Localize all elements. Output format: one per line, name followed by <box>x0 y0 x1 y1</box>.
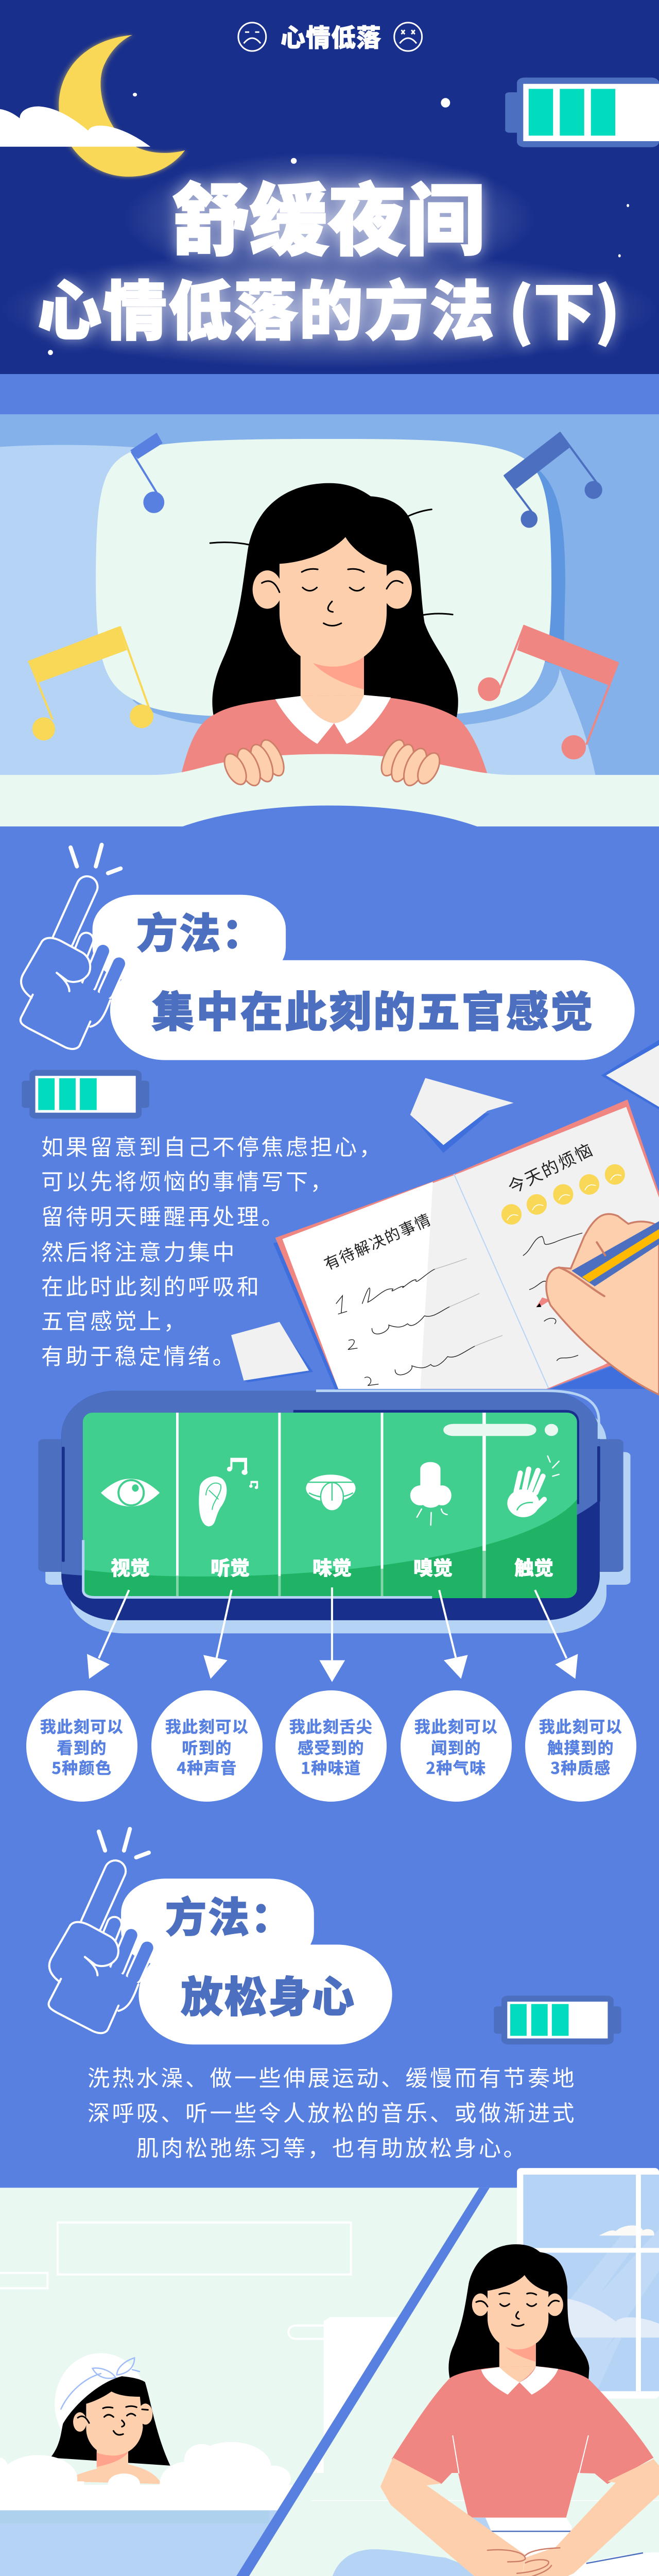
arrow: taste <box>319 1587 345 1682</box>
method title: 放松身心 <box>181 1963 356 2024</box>
icon: dark blue music note <box>504 432 602 528</box>
icon: blue music note <box>130 433 164 513</box>
panel: relaxation illustration <box>0 2168 659 2576</box>
panel: method 1 heading <box>21 845 635 1060</box>
panel: sleeping woman illustration <box>0 414 659 826</box>
callout: hearing <box>151 1690 263 1802</box>
text: method 1 description: 有助于稳定情绪。 <box>41 1339 237 1371</box>
sense labels: 触觉 <box>514 1552 553 1581</box>
illustration: notebook with hand <box>273 1099 659 1395</box>
callout: taste: 感受到的 <box>298 1735 365 1758</box>
title line 1: 舒缓夜间 <box>171 158 484 271</box>
wall background <box>0 2188 659 2576</box>
callout: smell: 我此刻可以 <box>414 1714 498 1737</box>
tablet side wings <box>38 1439 623 1572</box>
text: method 2 description: 肌肉松弛练习等，也有助放松身心。 <box>136 2131 528 2163</box>
callout: hearing: 我此刻可以 <box>165 1714 249 1737</box>
text: method 2 description: 深呼吸、听一些令人放松的音乐、或做渐进式 <box>88 2096 577 2128</box>
callout: touch: 3种质感 <box>550 1755 611 1778</box>
panel: window <box>517 2168 659 2399</box>
method label: 方法： <box>165 1885 293 1944</box>
callout: touch <box>525 1690 636 1802</box>
callout: taste: 我此刻舌尖 <box>289 1714 373 1737</box>
sense labels <box>111 1552 553 1581</box>
tablet shadows <box>45 1402 630 1633</box>
icon: pink music note <box>478 625 619 759</box>
icon: hand touch <box>507 1456 559 1517</box>
panel: night sky header <box>0 0 659 374</box>
callout: hearing: 4种声音 <box>177 1755 237 1778</box>
callout: touch: 我此刻可以 <box>539 1714 622 1737</box>
bath water <box>0 2510 278 2576</box>
sense labels: 味觉 <box>313 1552 352 1581</box>
text: method 1 description: 在此时此刻的呼吸和 <box>41 1269 262 1301</box>
callout: smell: 2种气味 <box>426 1755 487 1778</box>
text: method 2 description <box>88 2061 577 2163</box>
callout: sight: 我此刻可以 <box>40 1714 124 1737</box>
text: method 1 description: 然后将注意力集中 <box>41 1235 237 1267</box>
heading bubbles <box>121 1878 392 2044</box>
text: method 1 description: 可以先将烦恼的事情写下， <box>41 1164 335 1196</box>
foam bubbles <box>0 2442 294 2510</box>
callout: smell: 闻到的 <box>431 1735 481 1758</box>
text: method 1 description: 留待明天睡醒再处理。 <box>41 1199 286 1231</box>
illustration: paper scraps <box>231 1040 659 1382</box>
tablet body <box>61 1389 600 1620</box>
arrow: hearing <box>203 1590 232 1679</box>
icon: battery small <box>494 1995 621 2044</box>
icon: pointing hand <box>48 1829 149 2034</box>
text: method 1 description: 如果留意到自己不停焦虑担心， <box>41 1130 384 1162</box>
callout: touch: 触摸到的 <box>547 1735 614 1758</box>
speaker bar <box>443 1424 558 1436</box>
header label: 心情低落 <box>281 18 381 54</box>
callout: taste <box>275 1690 387 1802</box>
arrow: sight <box>87 1590 129 1679</box>
sleeping woman scene <box>0 414 659 826</box>
panel: method 2 heading <box>48 1829 392 2044</box>
method title: 集中在此刻的五官感觉 <box>152 978 595 1039</box>
sky background <box>0 0 659 374</box>
note text: things to solve: 有待解决的事情 <box>320 1207 435 1275</box>
text: method 2 description: 洗热水澡、做一些伸展运动、缓慢而有节奏地 <box>88 2061 577 2093</box>
arrow: touch <box>535 1590 578 1679</box>
title line 2 suffix: (下) <box>509 262 620 352</box>
towel <box>303 2317 397 2473</box>
icon: ear with music <box>199 1458 258 1527</box>
screen highlight <box>83 1540 432 1598</box>
icon: sad face left <box>238 23 266 51</box>
callout: taste: 1种味道 <box>301 1755 361 1778</box>
panel: bath scene <box>0 2223 397 2576</box>
arrow: smell <box>439 1590 468 1679</box>
callout: smell <box>401 1690 512 1802</box>
arrows to senses <box>87 1587 578 1682</box>
sense callouts <box>26 1690 636 1802</box>
sense labels: 视觉 <box>111 1552 150 1581</box>
note text: today's worries: 今天的烦恼 <box>503 1136 597 1198</box>
wall frames <box>0 2223 351 2339</box>
sense labels: 嗅觉 <box>413 1552 453 1581</box>
sense labels: 听觉 <box>211 1552 250 1581</box>
method label: 方法： <box>136 901 265 960</box>
icon: yellow music note <box>28 626 153 740</box>
title glow <box>0 152 659 368</box>
callout: sight: 5种颜色 <box>51 1755 112 1778</box>
callout: sight: 看到的 <box>57 1735 107 1758</box>
moon and cloud <box>0 35 185 177</box>
tablet screen <box>83 1413 577 1598</box>
text: method 1 description: 五官感觉上， <box>41 1304 188 1336</box>
heading bubbles <box>93 895 635 1060</box>
icon: battery <box>505 78 659 147</box>
meditating woman <box>330 2244 659 2576</box>
bathing woman <box>50 2353 170 2484</box>
stars <box>48 93 629 355</box>
callout: hearing: 听到的 <box>182 1735 232 1758</box>
title line 2: 心情低落的方法 <box>38 260 495 352</box>
diagonal divider <box>205 2188 490 2576</box>
icon: sad face right <box>394 23 422 51</box>
icon: battery small <box>22 1070 149 1118</box>
icon: pointing hand <box>21 845 120 1050</box>
icon: tongue <box>306 1475 356 1511</box>
icon: nose <box>410 1462 452 1525</box>
panel: tablet with five senses <box>38 1389 630 1633</box>
callout: sight <box>26 1690 137 1802</box>
text: method 1 description <box>41 1130 384 1371</box>
icon: eye <box>101 1479 160 1506</box>
